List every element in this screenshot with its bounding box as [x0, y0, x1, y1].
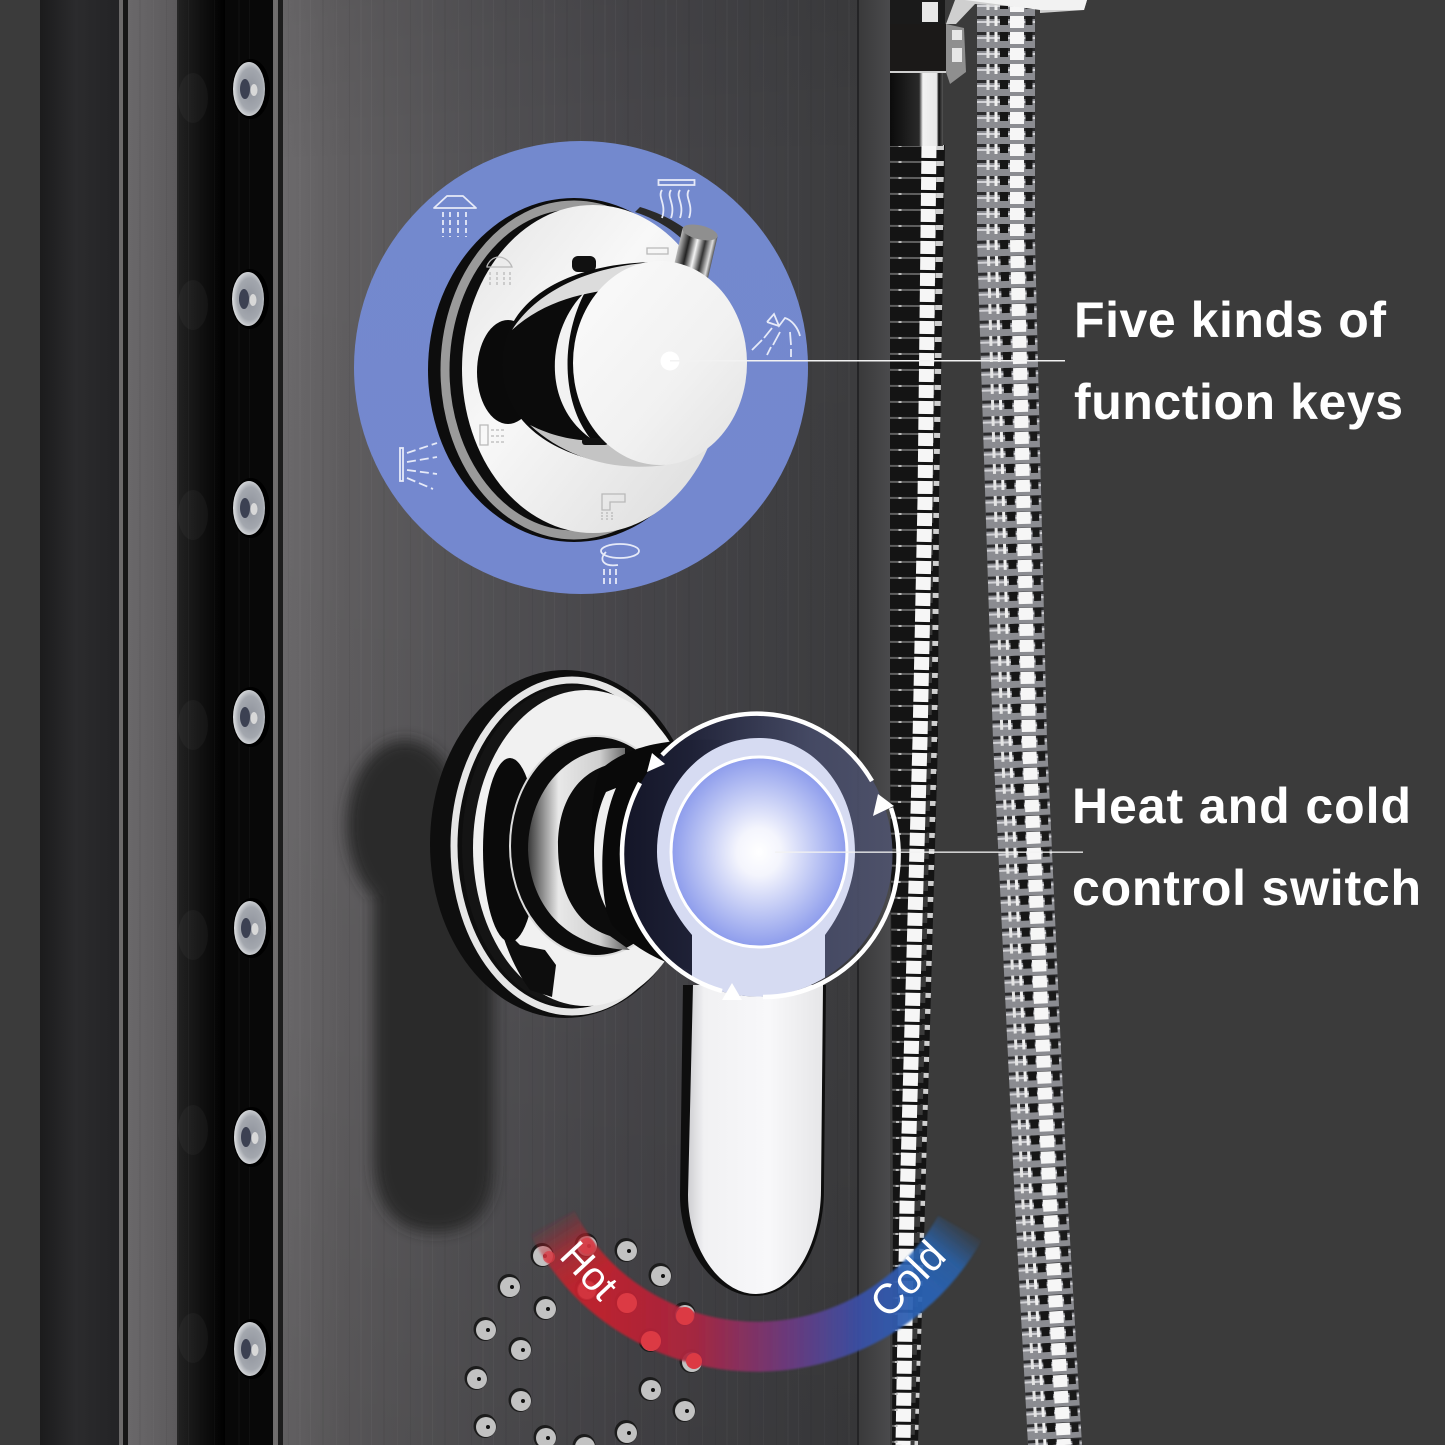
label: control switch: control switch — [1072, 860, 1421, 916]
label: control switch: Heat and cold — [1072, 778, 1411, 834]
label: Cold: Cold — [861, 1231, 954, 1326]
handle shadow — [347, 740, 494, 1232]
blue function disc — [354, 141, 808, 594]
label: function keys: Five kinds of — [1074, 292, 1386, 348]
diverter knob — [428, 198, 747, 542]
rotation arrows — [622, 714, 899, 997]
function key pointer — [660, 352, 1065, 370]
engraved plate marks — [480, 248, 668, 520]
label: Hot: Hot — [551, 1233, 626, 1309]
mixer plate — [430, 670, 720, 1018]
icon: waterfall — [658, 180, 694, 218]
hose: panel side — [890, 145, 945, 1445]
top hose connector — [890, 0, 1087, 146]
mixer cylinder — [510, 736, 720, 975]
hose: hand shower — [977, 4, 1082, 1445]
temperature dial overlay — [622, 712, 899, 1000]
temperature pointer — [775, 852, 1083, 853]
label: function keys: function keys — [1074, 374, 1403, 430]
hot to cold arc — [552, 1222, 960, 1347]
nozzles — [464, 1233, 702, 1445]
icon: hand shower spray — [752, 314, 800, 357]
icon: rain shower head — [434, 196, 476, 237]
icon: hand spray bottom — [601, 544, 639, 585]
lever pin — [672, 222, 719, 283]
shower panel body — [40, 0, 890, 1445]
arc nozzle tint — [543, 1238, 702, 1369]
mixer handle stem — [680, 985, 826, 1296]
label: function keys — [1074, 292, 1403, 430]
label: control switch — [1072, 778, 1421, 916]
side jet lights — [178, 59, 271, 1379]
icon: body jet — [400, 443, 437, 489]
